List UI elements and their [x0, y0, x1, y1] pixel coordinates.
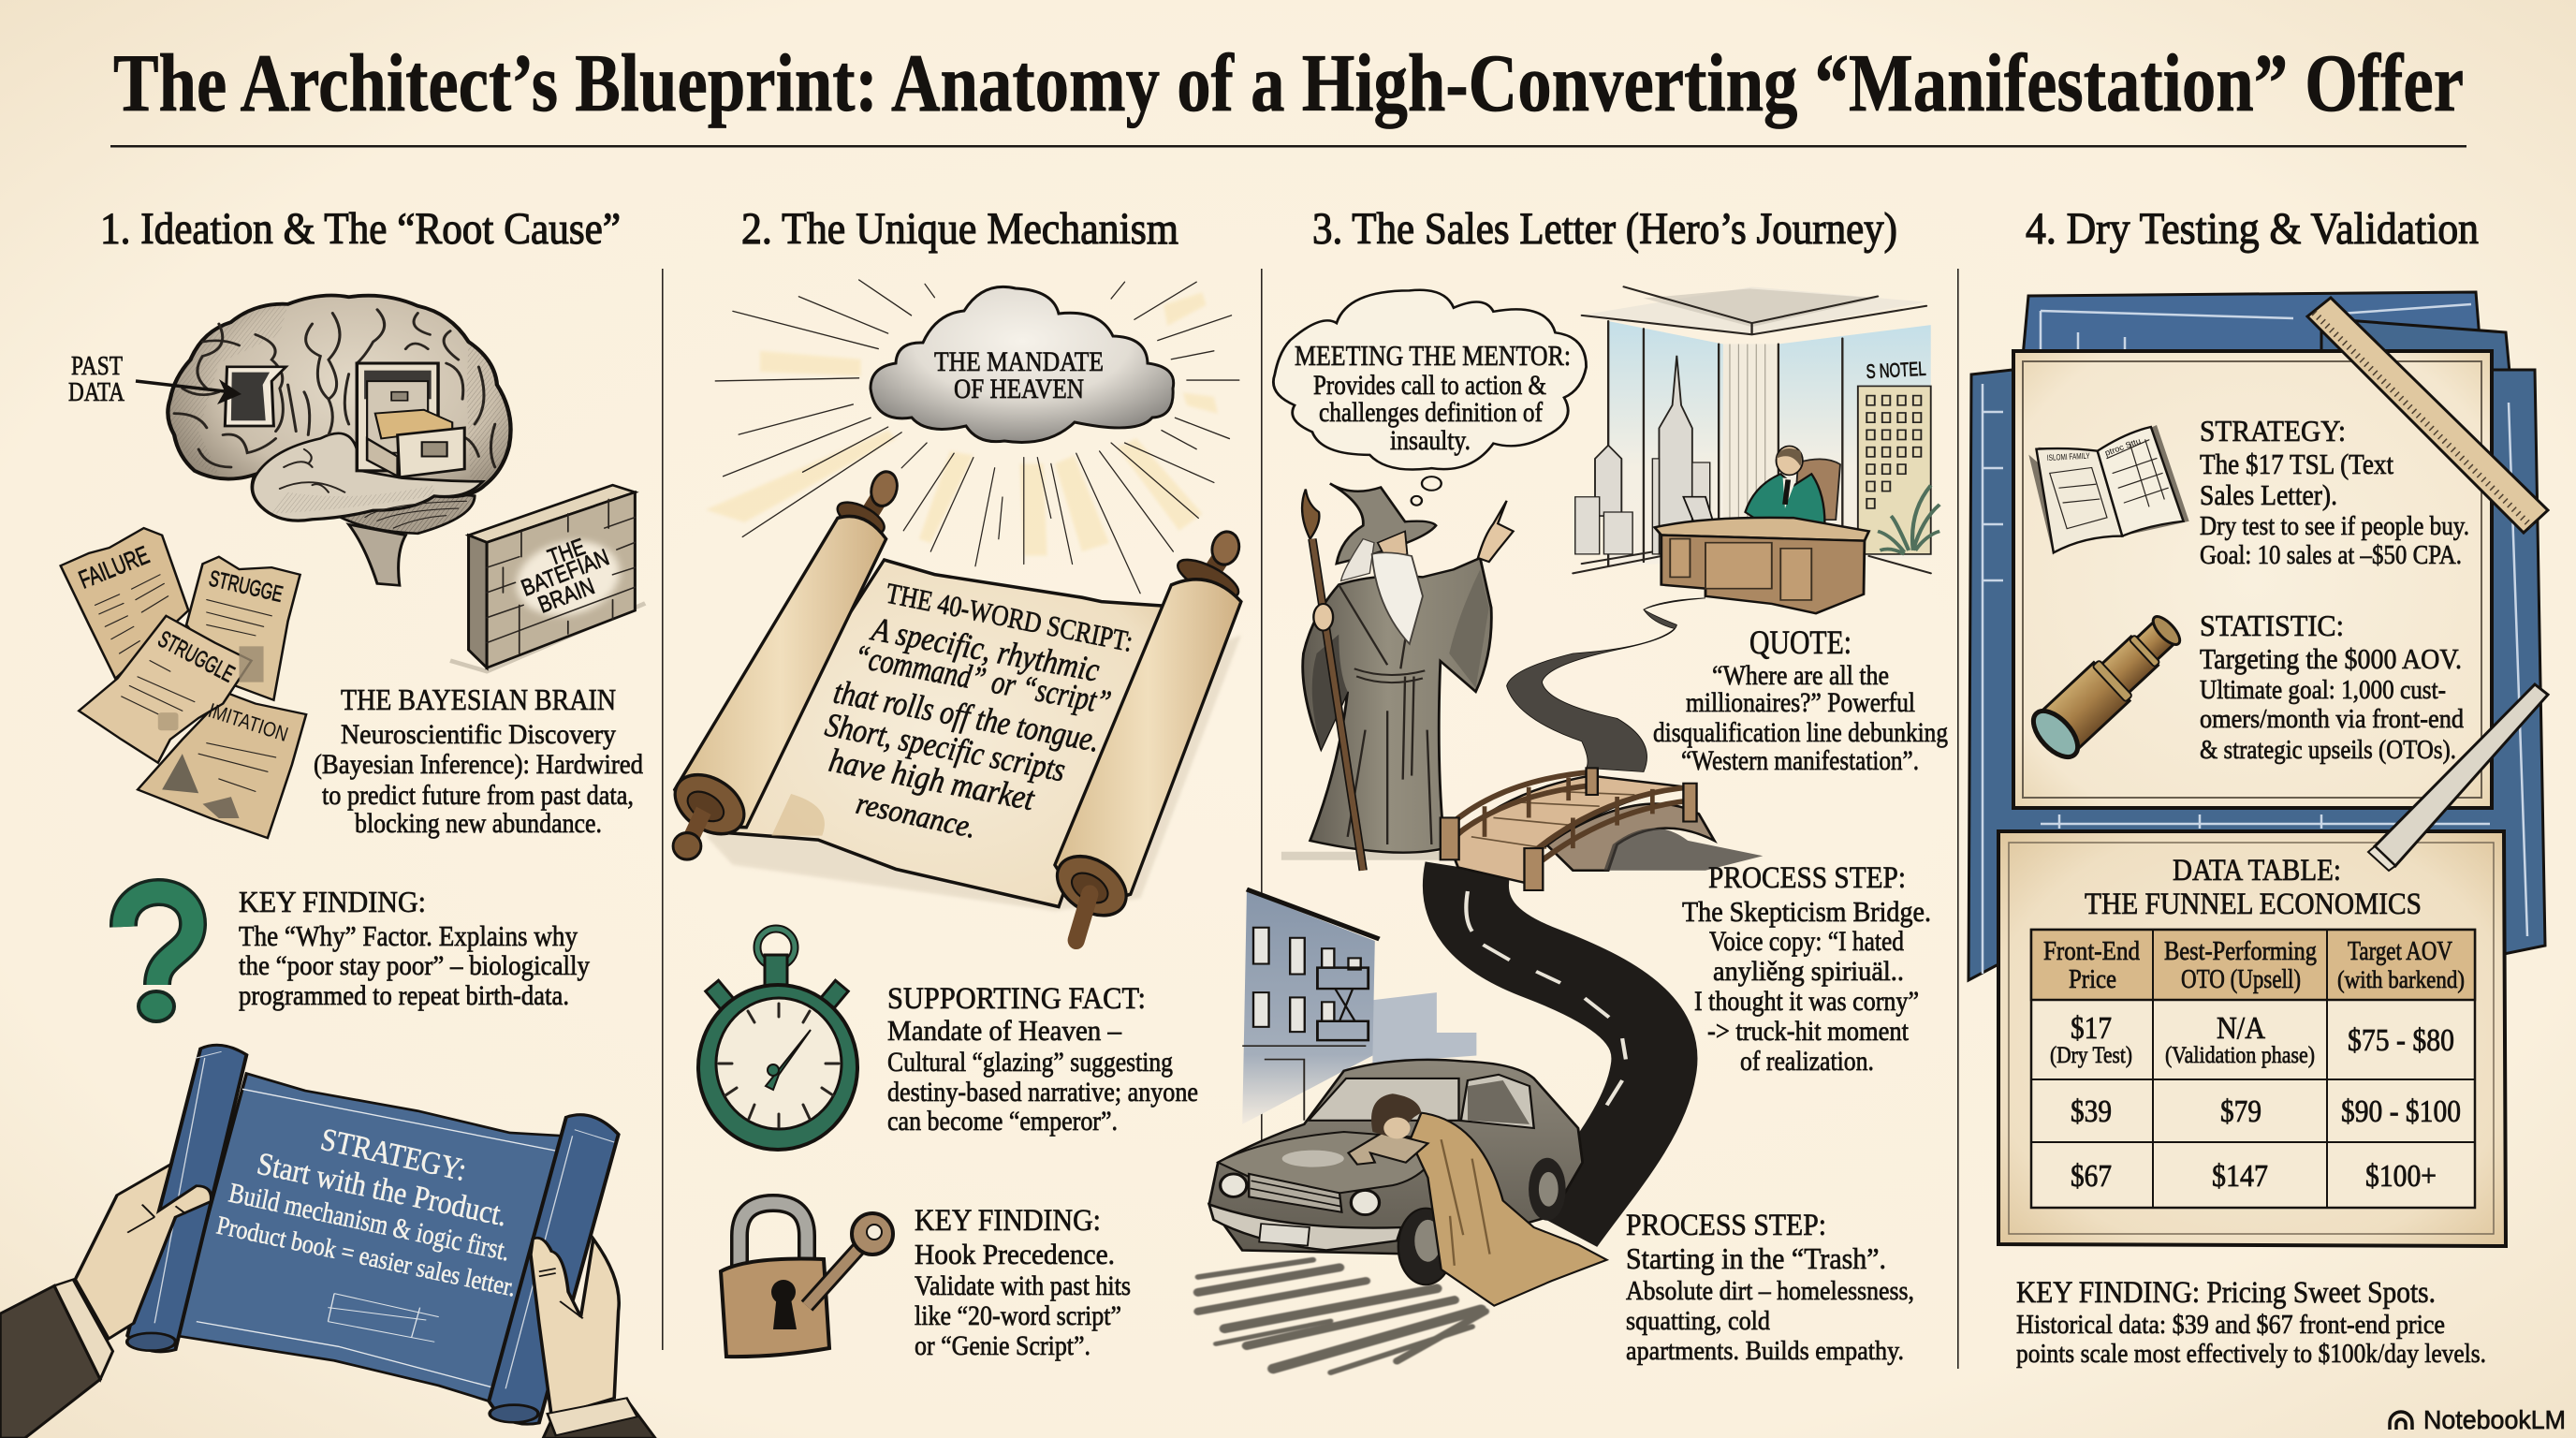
text block: statistic $000 AOV: STATISTIC: [2200, 609, 2344, 642]
text block: strategy $17 TSL: The $17 TSL (Text [2200, 448, 2393, 480]
panel: strategy and statistic card [2013, 351, 2492, 808]
text: paper labels: STRUGGE [207, 566, 285, 608]
text block: key finding pricing sweet spots [2016, 1276, 2486, 1369]
text block: supporting fact [887, 982, 1198, 1137]
icon: telescope [2026, 605, 2191, 765]
panel: ideation and root cause [0, 204, 655, 1438]
icon: city building [1242, 889, 1476, 1124]
icon: brain with filing cabinet [168, 295, 511, 585]
text: paper labels: STRUGGLE [154, 626, 239, 688]
icon: brick wall [450, 485, 645, 671]
text: meeting the mentor: MEETING THE MENTOR: [1295, 339, 1571, 372]
icon: wizard mentor [1281, 483, 1514, 871]
text block: key finding pricing sweet spots: Historical data: $39 and $67 front-end price [2016, 1310, 2445, 1340]
text block: strategy $17 TSL: Goal: 10 sales at –$50 CPA. [2200, 540, 2462, 570]
text: the 40-word script: resonance. [853, 787, 979, 845]
heading: data table: DATA TABLE: [2173, 854, 2341, 888]
panel: dry testing and validation [1969, 204, 2548, 1369]
text block: key finding why factor: KEY FINDING: [239, 885, 426, 918]
data table: Target AOV [2348, 937, 2452, 966]
icon: cloud [871, 286, 1174, 442]
text: blueprint strategy: STRATEGY: [317, 1123, 470, 1188]
text block: key finding hook precedence: Hook Precedence. [915, 1238, 1115, 1270]
text block: supporting fact: destiny-based narrative; anyone [887, 1077, 1198, 1108]
text block: statistic $000 AOV: Targeting the $000 AOV. [2200, 642, 2462, 675]
text block: key finding pricing sweet spots: points scale most effectively to $100k/day levels. [2016, 1339, 2486, 1369]
data table: $17 [2071, 1011, 2112, 1046]
icon: padlock and key [721, 1203, 893, 1357]
icon: question mark [124, 892, 193, 1021]
icon: executive office [1573, 286, 1939, 613]
text: the 40-word script: “command” or “script” [852, 638, 1114, 722]
text: paper labels: FAILURE [75, 541, 154, 594]
text: blueprint strategy: Start with the Product. [254, 1147, 510, 1233]
heading: section 4: 4. Dry Testing & Validation [2026, 204, 2479, 254]
text block: starting in the trash step: apartments. Builds empathy. [1626, 1336, 1904, 1366]
text block: quote: disqualification line debunking [1653, 717, 1948, 748]
blueprint sheets background [1969, 292, 2545, 980]
text block: skepticism bridge step: The Skepticism Bridge. [1682, 895, 1931, 928]
text block: quote: “Where are all the [1712, 660, 1889, 691]
label: past data: DATA [68, 378, 125, 407]
text block: statistic $000 AOV [2200, 609, 2464, 765]
text block: key finding hook precedence: KEY FINDING: [915, 1204, 1101, 1238]
text block: the Bayesian brain: Neuroscientific Discovery [341, 719, 616, 750]
text: the 40-word script [822, 577, 1135, 845]
text block: quote: millionaires?” Powerful [1686, 687, 1915, 718]
text block: key finding hook precedence: or “Genie Script”. [915, 1330, 1090, 1361]
text block: strategy $17 TSL: Sales Letter). [2200, 478, 2337, 511]
data table [2031, 930, 2475, 1208]
text: the 40-word script: Short, specific scripts [822, 706, 1068, 788]
text: paper labels: IMITATION [205, 698, 291, 746]
text: blueprint strategy: Build mechanism & iogic first. [227, 1178, 513, 1267]
text block: skepticism bridge step: -> truck-hit moment [1707, 1016, 1910, 1047]
text block: key finding hook precedence: like “20-word script” [915, 1300, 1121, 1331]
text block: key finding why factor: programmed to repeat birth-data. [239, 980, 569, 1011]
text block: supporting fact: can become “emperor”. [887, 1106, 1118, 1137]
text block: skepticism bridge step: Voice copy: “I hated [1709, 926, 1904, 957]
text block: the Bayesian brain [314, 682, 643, 839]
data table: Price [2069, 964, 2116, 994]
text: mandate of heaven [934, 346, 1104, 404]
heading: section 2: 2. The Unique Mechanism [741, 204, 1178, 254]
road: upper winding path [1507, 598, 1705, 771]
data table: (Validation phase) [2165, 1043, 2315, 1068]
icon: stopwatch [698, 929, 857, 1150]
icon: broken car [1198, 1060, 1607, 1372]
text block: statistic $000 AOV: & strategic upseils (OTOs). [2200, 735, 2456, 765]
text block: quote: “Western manifestation”. [1681, 745, 1919, 776]
text: the 40-word script: THE 40-WORD SCRIPT: [884, 577, 1135, 658]
text: S Notel sign: S NOTEL [1866, 359, 1926, 383]
text block: key finding why factor: The “Why” Factor. Explains why [239, 919, 578, 952]
text block: skepticism bridge step: I thought it was corny” [1694, 986, 1919, 1017]
data table: Front-End [2043, 936, 2140, 966]
text block: the Bayesian brain: blocking new abundance. [355, 808, 602, 839]
text block: starting in the trash step [1626, 1209, 1914, 1366]
text: ledger labels: ptroc Sttu [2103, 436, 2142, 458]
text block: key finding pricing sweet spots: KEY FINDING: Pricing Sweet Spots. [2016, 1276, 2436, 1310]
icon: torn papers [61, 528, 306, 838]
text block: skepticism bridge step: PROCESS STEP: [1708, 861, 1906, 895]
heading: data table: THE FUNNEL ECONOMICS [2085, 888, 2422, 921]
text: meeting the mentor: insaulty. [1390, 425, 1471, 456]
text: the 40-word script: A specific, rhythmic [868, 609, 1103, 689]
data table: $147 [2212, 1159, 2268, 1194]
text block: starting in the trash step: Starting in the “Trash”. [1626, 1241, 1886, 1275]
text: meeting the mentor: Provides call to action & [1313, 370, 1546, 401]
text: meeting the mentor [1295, 339, 1571, 456]
text block: key finding hook precedence: Validate with past hits [915, 1270, 1131, 1301]
label: past data: PAST [71, 352, 123, 381]
text: blueprint strategy: Product book = easier sales letter. [214, 1211, 519, 1303]
data table: $67 [2071, 1159, 2112, 1194]
data table: $100+ [2365, 1159, 2437, 1194]
text: meeting the mentor: challenges definition of [1319, 397, 1543, 428]
text: the 40-word script: have high market [826, 741, 1038, 817]
text block: the Bayesian brain: THE BAYESIAN BRAIN [341, 682, 616, 716]
text block: starting in the trash step: squatting, cold [1626, 1306, 1770, 1336]
icon: hands holding blueprint scroll [0, 1045, 655, 1438]
data table: $75 - $80 [2348, 1023, 2454, 1058]
text block: quote [1653, 624, 1948, 776]
heading: data table [2085, 854, 2422, 921]
text: wall label: BATEFIAN [518, 544, 613, 602]
text: mandate of heaven: OF HEAVEN [954, 374, 1084, 404]
text block: strategy $17 TSL [2200, 414, 2469, 570]
text: wall label: THE [545, 534, 589, 571]
text block: strategy $17 TSL: STRATEGY: [2200, 414, 2346, 448]
rays of light [706, 280, 1239, 594]
text block: key finding why factor [239, 885, 590, 1011]
text block: supporting fact: SUPPORTING FACT: [887, 982, 1146, 1016]
data table: Best-Performing [2164, 937, 2317, 966]
icon: thought bubble [1273, 290, 1587, 506]
text block: skepticism bridge step: of realization. [1740, 1046, 1874, 1077]
text block: skepticism bridge step: anyliěng spiriuäl.. [1713, 956, 1904, 987]
text block: skepticism bridge step [1682, 861, 1931, 1077]
text block: key finding why factor: the “poor stay poor” – biologically [239, 950, 590, 981]
data table: (Dry Test) [2050, 1043, 2132, 1068]
text block: key finding hook precedence [915, 1204, 1131, 1361]
text block: the Bayesian brain: to predict future from past data, [322, 780, 634, 811]
text: ledger labels: ISLOMI FAMILY [2047, 451, 2090, 462]
label: past data [68, 352, 125, 407]
text: wall label: BRAIN [534, 573, 598, 619]
icon: open ledger book [2028, 425, 2189, 556]
data table: $90 - $100 [2341, 1094, 2461, 1129]
text block: supporting fact: Cultural “glazing” suggesting [887, 1047, 1173, 1078]
icon: pencil [2368, 684, 2548, 871]
icon: parchment scroll [666, 468, 1243, 940]
data table: (with barkend) [2337, 966, 2465, 993]
icon: skepticism bridge [1441, 768, 1763, 890]
text: the 40-word script: that rolls off the tongue. [831, 673, 1103, 759]
logo: NotebookLM: NotebookLM [2423, 1405, 2566, 1434]
icon: ruler [2307, 298, 2548, 533]
heading: section 1: 1. Ideation & The “Root Cause” [100, 204, 621, 254]
text block: statistic $000 AOV: omers/month via front-end [2200, 704, 2464, 734]
road: lower main road [1466, 869, 1654, 1227]
panel: sales letter hero's journey [1198, 204, 1948, 1372]
text block: supporting fact: Mandate of Heaven – [887, 1014, 1121, 1047]
text block: statistic $000 AOV: Ultimate goal: 1,000 cust- [2200, 675, 2446, 705]
data table: $39 [2071, 1094, 2112, 1129]
text: wall label [518, 534, 613, 619]
text: ledger labels [2047, 436, 2142, 462]
data table: N/A [2217, 1011, 2265, 1046]
text block: starting in the trash step: PROCESS STEP: [1626, 1209, 1826, 1242]
text block: quote: QUOTE: [1749, 624, 1852, 661]
heading: section 3: 3. The Sales Letter (Hero’s Journey) [1312, 204, 1897, 254]
text block: the Bayesian brain: (Bayesian Inference): Hardwired [314, 749, 643, 780]
panel: unique mechanism [666, 204, 1243, 1361]
panel: funnel economics card [1998, 831, 2506, 1246]
text: paper labels [75, 541, 291, 746]
text: mandate of heaven: THE MANDATE [934, 346, 1104, 377]
text: blueprint strategy [214, 1123, 519, 1303]
text block: strategy $17 TSL: Dry test to see if people buy. [2200, 511, 2469, 541]
text block: starting in the trash step: Absolute dirt – homelessness, [1626, 1276, 1914, 1306]
data table: $79 [2220, 1094, 2261, 1129]
data table: OTO (Upsell) [2181, 965, 2301, 994]
arrow: past data into brain [136, 379, 242, 404]
